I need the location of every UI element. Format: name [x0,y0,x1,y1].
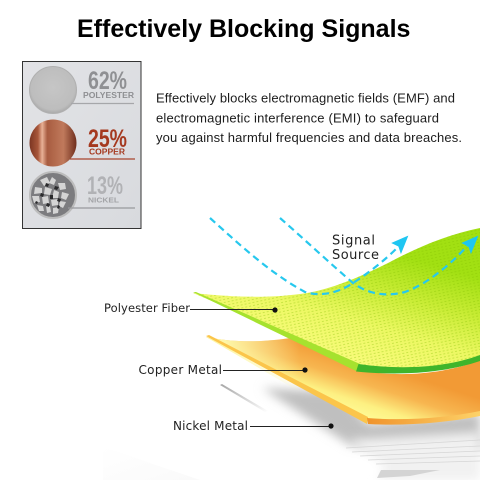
row: nickel: 13% [87,172,123,200]
copper layer [206,335,480,425]
description text: electromagnetic interference (EMI) to safeguard [156,110,439,125]
row: polyester [30,66,134,114]
row: copper [30,120,135,166]
callout: copper metal: Copper Metal [138,363,222,377]
signal wave 2 [280,218,477,294]
callout: polyester fiber: Polyester Fiber [104,301,190,315]
title: Effectively Blocking Signals [77,15,410,43]
row: nickel: NICKEL [88,196,119,204]
polyester layer [193,228,480,373]
row: polyester: 62% [88,67,127,95]
callout: polyester fiber [104,301,278,315]
callout: nickel metal: Nickel Metal [173,419,248,433]
description text: Effectively blocks electromagnetic fields (EMF) and [156,91,455,106]
row: polyester: POLYESTER [83,91,134,100]
callout: nickel metal [173,419,334,433]
nickel layer [103,384,480,480]
row: copper: 25% [88,125,127,153]
row: copper: COPPER [89,148,125,156]
signal wave 1 [210,218,407,294]
row: nickel [30,172,135,218]
description text [156,91,462,145]
description text: you against harmful frequencies and data breaches. [156,130,462,145]
callout: copper metal [138,363,308,377]
label: signal source line 2: Source [332,248,379,263]
panel: material composition [22,61,142,229]
label: signal source: Signal [332,234,375,248]
